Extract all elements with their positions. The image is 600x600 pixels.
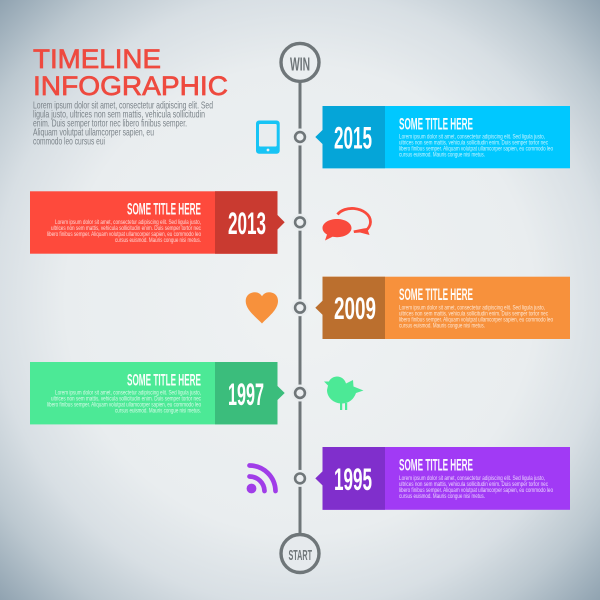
icon: speech bubbles (322, 208, 370, 240)
intro text block: commodo leo cursus eui (33, 136, 105, 148)
panel: 2013: 2013 (228, 205, 266, 241)
panel: 2015: Lorem ipsum dolor sit amet, consectetur adipiscing elit. Sed ligula justo, (399, 135, 545, 141)
win marker: WIN (290, 54, 310, 74)
panel: 2015: libero finibus semper. Aliquam volutpat ullamcorper sapien, eu commodo leo (399, 147, 553, 153)
icon: heart (246, 292, 278, 324)
panel: 2009: Lorem ipsum dolor sit amet, consectetur adipiscing elit. Sed ligula justo, (399, 305, 545, 311)
panel: 2013: cursus euismod. Mauris congue nisi metus. (115, 238, 201, 244)
panel: 2013: ultrices non sem mattis, vehicula sollicitudin enim. Duis semper tortor nec (51, 226, 201, 232)
panel: 1995: SOME TITLE HERE (399, 456, 473, 474)
icon: rss feed (247, 466, 276, 493)
node: 2013 (292, 214, 308, 231)
panel: 1995 (315, 447, 570, 510)
panel: 1997: libero finibus semper. Aliquam volutpat ullamcorper sapien, eu commodo leo (47, 402, 201, 408)
panel: 2009: ultrices non sem mattis, vehicula sollicitudin enim. Duis semper tortor nec (399, 311, 548, 317)
win marker (281, 43, 319, 81)
intro text block: Aliquam volutpat ullamcorper sapien, eu (33, 126, 154, 138)
panel: 1995: 1995 (334, 461, 372, 497)
panel: 2013: SOME TITLE HERE (127, 201, 201, 219)
panel: 2013: Lorem ipsum dolor sit amet, consectetur adipiscing elit. Sed ligula justo, (55, 220, 201, 226)
panel: 1995: cursus euismod. Mauris congue nisi metus. (399, 494, 485, 500)
start marker: START (288, 547, 312, 564)
panel: 1997 (30, 362, 285, 424)
intro text block: Lorem ipsum dolor sit amet, consectetur adipiscing elit. Sed (33, 100, 213, 112)
icon: tablet (256, 120, 280, 154)
panel: 2015: 2015 (334, 120, 372, 156)
panel: 2009: libero finibus semper. Aliquam volutpat ullamcorper sapien, eu commodo leo (399, 317, 553, 323)
panel: 2009: 2009 (334, 290, 376, 326)
panel: 1997: ultrices non sem mattis, vehicula sollicitudin enim. Duis semper tortor nec (51, 396, 201, 402)
panel: 1995: Lorem ipsum dolor sit amet, consectetur adipiscing elit. Sed ligula justo, (399, 476, 545, 482)
intro text block (33, 100, 213, 148)
title (33, 44, 228, 101)
intro text block: ligula justo, ultrices non sem mattis, vehicula sollicitudin (33, 108, 205, 120)
title: TIMELINE (33, 44, 161, 74)
panel: 1997: cursus euismod. Mauris congue nisi metus. (115, 408, 201, 414)
node: 1995 (292, 470, 308, 487)
node: 2015 (292, 128, 308, 146)
panel: 1997: 1997 (228, 376, 264, 412)
panel: 1997: SOME TITLE HERE (127, 371, 201, 389)
panel: 2015 (315, 106, 570, 168)
panel: 1997: Lorem ipsum dolor sit amet, consectetur adipiscing elit. Sed ligula justo, (55, 390, 201, 396)
panel: 2013: libero finibus semper. Aliquam volutpat ullamcorper sapien, eu commodo leo (47, 232, 201, 238)
panel: 2015: SOME TITLE HERE (399, 115, 473, 133)
panel: 2015: cursus euismod. Mauris congue nisi metus. (399, 153, 485, 159)
panel: 2013 (30, 191, 285, 254)
panel: 2009: SOME TITLE HERE (399, 286, 473, 304)
panel: 2009: cursus euismod. Mauris congue nisi metus. (399, 323, 485, 329)
node: 1997 (292, 384, 308, 402)
panel: 2015: ultrices non sem mattis, vehicula sollicitudin enim. Duis semper tortor nec (399, 141, 548, 147)
start marker (281, 534, 319, 572)
timeline axis (298, 81, 302, 534)
title: INFOGRAPHIC (33, 71, 228, 101)
panel: 1995: ultrices non sem mattis, vehicula sollicitudin enim. Duis semper tortor nec (399, 482, 548, 488)
node: 2009 (292, 299, 308, 316)
panel: 2009 (315, 277, 570, 339)
panel: 1995: libero finibus semper. Aliquam volutpat ullamcorper sapien, eu commodo leo (399, 488, 553, 494)
icon: bird (324, 376, 364, 410)
intro text block: enim. Duis semper tortor nec libero finibus semper. (33, 118, 187, 130)
